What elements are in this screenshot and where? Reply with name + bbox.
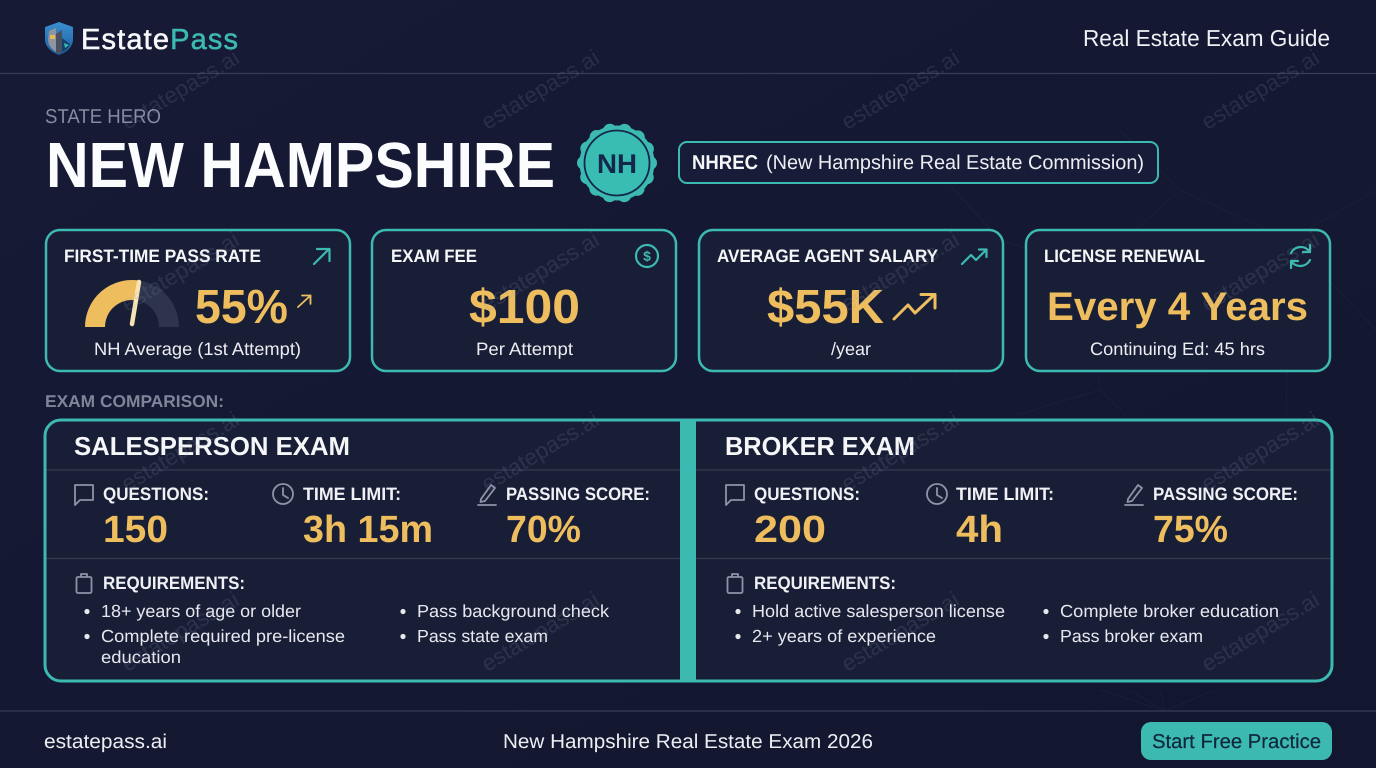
watermarks: estatepass.ai [1197,227,1323,317]
card title: AVERAGE AGENT SALARY [717,246,938,266]
column: salesperson exam [74,431,650,667]
header guide label: Real Estate Exam Guide [1083,25,1330,51]
call-to-action button [1141,722,1332,760]
watermarks: estatepass.ai [477,227,603,317]
watermarks [117,45,1323,677]
icon: dollar coin [636,245,658,267]
column: broker exam [725,431,1298,646]
requirements list: Pass state exam [417,626,548,646]
time limit stat: 4h [956,509,1003,551]
requirements list [84,601,609,667]
card caption: NH Average (1st Attempt) [94,339,301,359]
watermarks: estatepass.ai [1197,587,1323,677]
time limit stat: TIME LIMIT: [303,484,401,504]
state badge [580,126,654,200]
icon: trend line [962,250,986,264]
logo wordmark: EstatePass [81,24,238,56]
card title: EXAM FEE [391,246,477,266]
time limit stat [956,484,1054,551]
watermarks: estatepass.ai [1197,45,1323,135]
icon: speech bubble [726,485,744,505]
icon: clipboard [76,574,92,593]
stat card: exam fee [372,230,676,371]
card title: LICENSE RENEWAL [1044,246,1205,266]
requirements list: Pass broker exam [1060,626,1203,646]
icon: clock [273,484,293,504]
passing score stat: PASSING SCORE: [1153,484,1298,504]
eyebrow label: STATE HERO [45,106,161,128]
passing score stat: PASSING SCORE: [506,484,650,504]
passing score stat: 75% [1153,509,1228,551]
state badge: NH [597,149,637,179]
icon: speech bubble [75,485,93,505]
header [0,22,1376,74]
column heading: SALESPERSON EXAM [74,431,350,461]
panel: exam comparison [45,420,1332,681]
watermarks: estatepass.ai [837,587,963,677]
requirements list: Pass background check [417,601,609,621]
watermarks: estatepass.ai [117,45,243,135]
watermarks: estatepass.ai [837,407,963,497]
renewal value: Every 4 Years [1047,285,1308,329]
time limit stat: 3h 15m [303,509,433,551]
watermarks: estatepass.ai [1197,407,1323,497]
passing score stat [506,484,650,551]
commission pill: NHREC [692,152,758,174]
salary value: $55K [767,281,884,334]
call-to-action button: Start Free Practice [1152,731,1321,753]
stat card: license renewal [1026,230,1330,371]
questions stat [754,484,860,551]
icon: clock [927,484,947,504]
requirements list: Complete broker education [1060,601,1279,621]
questions stat: QUESTIONS: [103,484,209,504]
icon: EstatePass shield logo [45,22,73,55]
commission pill [679,142,1158,183]
requirements heading: REQUIREMENTS: [754,573,896,593]
card caption: Per Attempt [476,339,573,359]
questions stat: QUESTIONS: [754,484,860,504]
requirements list: education [101,647,181,667]
icon: pencil [478,485,496,505]
footer [0,711,1376,760]
footer site name: estatepass.ai [44,731,167,753]
requirements list: Complete required pre-license [101,626,345,646]
watermarks: estatepass.ai [837,227,963,317]
watermarks: estatepass.ai [117,407,243,497]
time limit stat: TIME LIMIT: [956,484,1054,504]
stat card: average agent salary [699,230,1003,371]
requirements list: Hold active salesperson license [752,601,1005,621]
requirements list: 2+ years of experience [752,626,936,646]
icon: small up arrow [298,296,310,307]
stat card: first-time pass rate [46,230,350,371]
card caption: /year [831,339,871,359]
card title: FIRST-TIME PASS RATE [64,246,261,266]
passing score stat [1153,484,1298,551]
card caption: Continuing Ed: 45 hrs [1090,339,1265,359]
questions stat: 200 [754,509,826,551]
watermarks: estatepass.ai [837,45,963,135]
state title: NEW HAMPSHIRE [46,129,555,201]
watermarks: estatepass.ai [477,407,603,497]
requirements list [735,601,1279,646]
gauge chart [95,282,169,327]
time limit stat [303,484,433,551]
questions stat: 150 [103,509,168,551]
icon: renewal arrows [1291,245,1310,268]
icon: gold trend arrow [894,294,935,319]
watermarks: estatepass.ai [117,587,243,677]
watermarks: estatepass.ai [477,587,603,677]
icon: pencil [1125,485,1143,505]
icon: dollar coin: $ [643,248,651,264]
icon: teal arrow [314,249,330,264]
watermarks: estatepass.ai [117,227,243,317]
icon: clipboard [728,574,742,593]
requirements list: 18+ years of age or older [101,601,301,621]
hero section [45,106,1158,201]
requirements heading: REQUIREMENTS: [103,573,245,593]
section heading: EXAM COMPARISON: [45,392,224,411]
questions stat [103,484,209,551]
pass rate value: 55% [195,281,288,334]
column heading: BROKER EXAM [725,431,915,461]
fee value: $100 [469,281,580,334]
watermarks: estatepass.ai [477,45,603,135]
footer center title: New Hampshire Real Estate Exam 2026 [503,731,873,753]
commission pill: (New Hampshire Real Estate Commission) [766,152,1144,174]
passing score stat: 70% [506,509,581,551]
